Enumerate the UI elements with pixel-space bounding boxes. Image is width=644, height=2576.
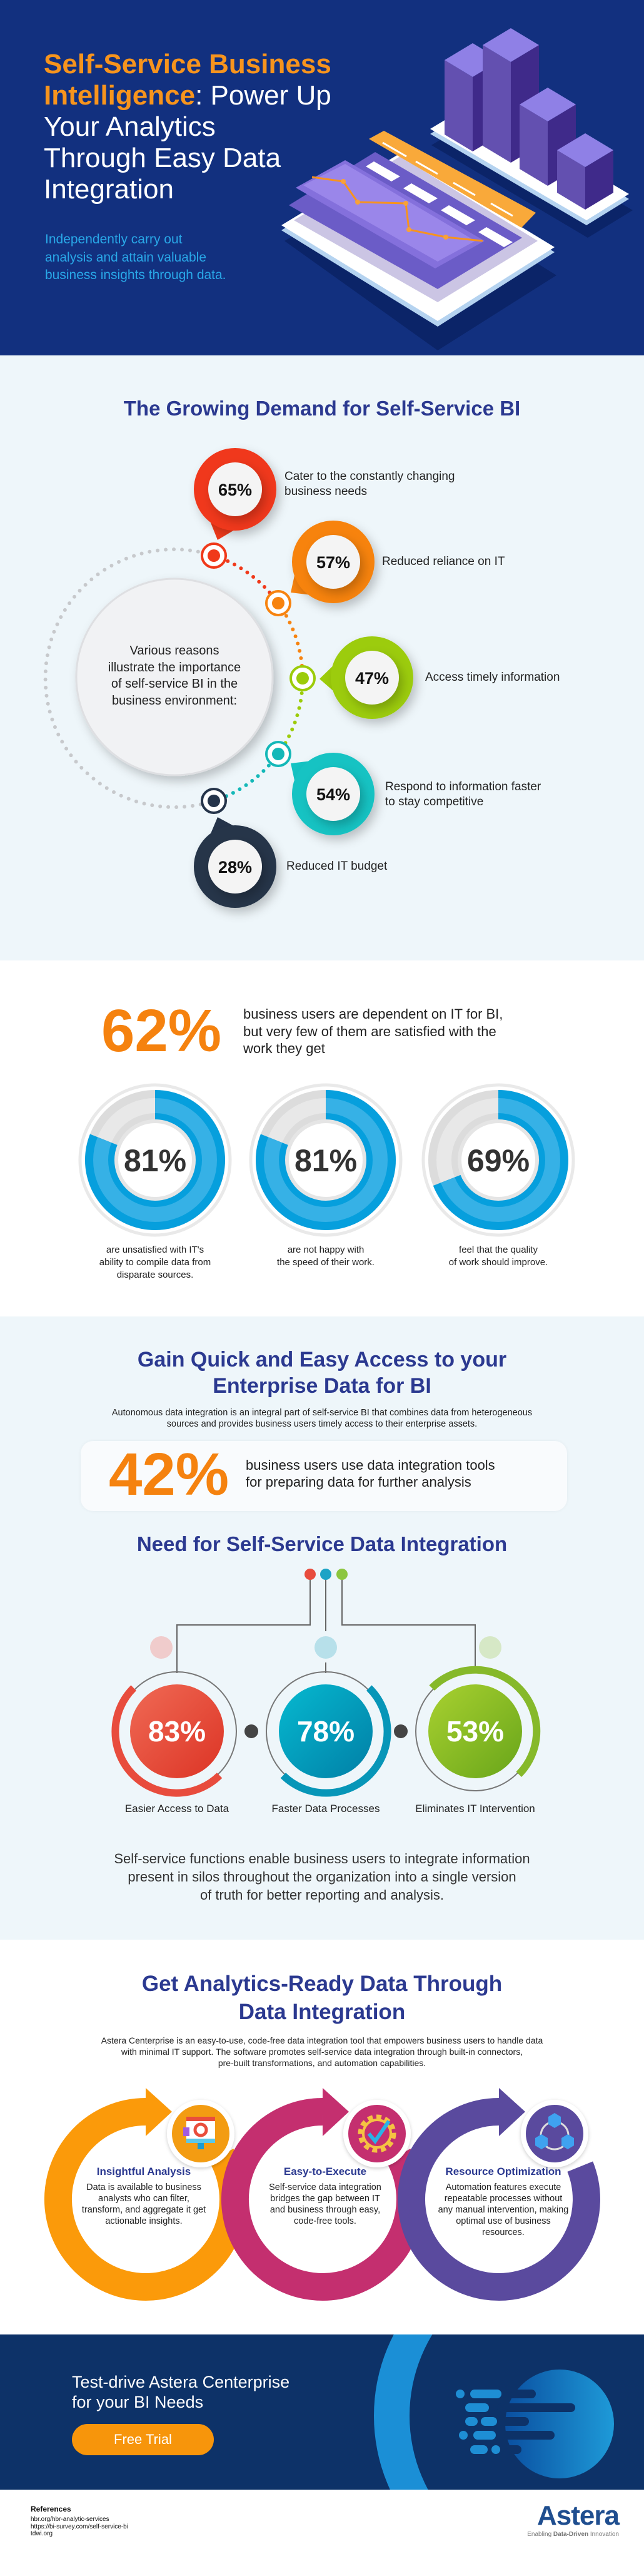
- donut label 3: feel that the quality: [459, 1245, 538, 1255]
- arrow magenta: [235, 2088, 410, 2287]
- panel: growing demand: [0, 355, 644, 960]
- stat text: business users use data integration tools: [246, 1457, 495, 1473]
- arrow orange: [58, 2088, 233, 2287]
- intro text: Astera Centerprise is an easy-to-use, code-free data integration tool that empowers business users to handle data: [101, 2035, 543, 2045]
- stat text: but very few of them are satisfied with the: [243, 1024, 496, 1039]
- step 2: Easy-to-Execute: [284, 2166, 366, 2177]
- heading: Get Analytics-Ready Data Through: [142, 1972, 502, 1996]
- donut label 3: [449, 1245, 548, 1268]
- panel: analytics-ready data: [0, 1940, 644, 2334]
- arrow purple: [411, 2088, 586, 2287]
- center text: of self-service BI in the: [111, 677, 238, 691]
- donut charts: 81%: [294, 1143, 357, 1178]
- intro text: [101, 2035, 543, 2068]
- button: free trial: Free Trial: [114, 2431, 172, 2447]
- circle chart: 53%: [446, 1715, 504, 1748]
- donut label 1: are unsatisfied with IT's: [106, 1245, 204, 1255]
- panel: 62% stats: [0, 960, 644, 1316]
- stat card 42%: [81, 1441, 567, 1511]
- step 1: Data is available to business analysts who can filter, transform, and aggregate it get actionable insights.: [82, 2182, 206, 2226]
- label 28: Reduced IT budget: [286, 860, 387, 873]
- label 54: [385, 780, 541, 808]
- summary text: Self-service functions enable business users to integrate information: [114, 1851, 530, 1866]
- center circle: [76, 579, 273, 775]
- references: [31, 2505, 128, 2537]
- references: hbr.org/hbr-analytic-services: [31, 2516, 109, 2523]
- center text: [108, 644, 241, 707]
- intro text: with minimal IT support. The software promotes self-service data integration through built-in connectors,: [121, 2047, 523, 2057]
- heading: Gain Quick and Easy Access to your: [138, 1348, 506, 1372]
- heading: Data Integration: [239, 2000, 405, 2024]
- bubbles: 28%: [218, 858, 252, 877]
- label 54: Respond to information faster: [385, 780, 541, 793]
- label 65: business needs: [284, 485, 367, 498]
- intro text: pre-built transformations, and automation capabilities.: [218, 2058, 426, 2068]
- bubbles: 57%: [316, 553, 350, 572]
- label 47: Access timely information: [425, 671, 560, 684]
- button: free trial: [72, 2424, 214, 2455]
- circle chart: [111, 1569, 540, 1797]
- donut label 1: ability to compile data from: [99, 1257, 211, 1268]
- center text: business environment:: [112, 693, 237, 707]
- circle label 3: Eliminates IT Intervention: [415, 1803, 535, 1815]
- donut charts: [79, 1084, 575, 1236]
- big stat 42%: 42%: [109, 1441, 229, 1508]
- stat text: work they get: [243, 1041, 325, 1056]
- donut label 1: disparate sources.: [117, 1270, 193, 1280]
- label 54: to stay competitive: [385, 795, 483, 808]
- title: Integration: [44, 174, 174, 205]
- icon circles: [167, 2100, 588, 2167]
- donut label 3: of work should improve.: [449, 1257, 548, 1268]
- intro text: Autonomous data integration is an integral part of self-service BI that combines data from heterogeneous: [112, 1408, 532, 1418]
- summary text: of truth for better reporting and analysis.: [200, 1887, 444, 1903]
- logo: astera: Astera: [537, 2500, 619, 2531]
- title: [44, 49, 331, 205]
- graphic: astera emblem: [374, 2334, 614, 2490]
- stat text: [243, 1006, 503, 1056]
- label 57: Reduced reliance on IT: [382, 555, 505, 568]
- references: https://bi-survey.com/self-service-bi: [31, 2523, 128, 2530]
- summary text: [114, 1851, 530, 1903]
- stat text: business users are dependent on IT for BI,: [243, 1006, 503, 1022]
- markers: [202, 544, 314, 813]
- bubbles: 65%: [218, 481, 252, 499]
- radial chart: [44, 448, 421, 917]
- cta text: [72, 2373, 289, 2411]
- panel: call to action: [0, 2334, 644, 2490]
- summary text: present in silos throughout the organization into a single version: [128, 1869, 516, 1885]
- label 65: Cater to the constantly changing: [284, 470, 455, 483]
- donut label 2: the speed of their work.: [277, 1257, 375, 1268]
- cta text: for your BI Needs: [72, 2393, 203, 2411]
- heading: [138, 1348, 506, 1398]
- references: tdwi.org: [31, 2530, 53, 2537]
- subtitle: [45, 232, 226, 282]
- subtitle: Independently carry out: [45, 232, 182, 247]
- step 3: Automation features execute repeatable processes without any manual intervention, making optimal use of business resources.: [438, 2182, 568, 2237]
- bars: [445, 28, 613, 210]
- stat text: for preparing data for further analysis: [246, 1474, 471, 1490]
- heading: Enterprise Data for BI: [213, 1374, 431, 1398]
- cycle arrows: [44, 2088, 600, 2301]
- donut label 2: [277, 1245, 375, 1268]
- donut charts: 69%: [467, 1143, 530, 1178]
- references: References: [31, 2505, 71, 2513]
- subtitle: analysis and attain valuable: [45, 250, 206, 264]
- big stat 62%: 62%: [101, 997, 221, 1064]
- donut label 2: are not happy with: [288, 1245, 364, 1255]
- panel: data integration need: [0, 1316, 644, 1940]
- title: Through Easy Data: [44, 143, 281, 173]
- subheading: Need for Self-Service Data Integration: [137, 1532, 507, 1555]
- step 3: Resource Optimization: [445, 2166, 561, 2177]
- bubbles: 47%: [355, 669, 389, 688]
- step 1: Insightful Analysis: [97, 2166, 191, 2177]
- bubbles: [194, 448, 413, 908]
- donut label 1: [99, 1245, 211, 1280]
- bubbles: 54%: [316, 785, 350, 804]
- circle chart: 78%: [297, 1715, 355, 1748]
- circle chart: 83%: [148, 1715, 206, 1748]
- panel: footer: [0, 2490, 644, 2576]
- intro text: [111, 1408, 532, 1429]
- donut charts: 81%: [124, 1143, 186, 1178]
- title: Your Analytics: [44, 111, 216, 142]
- subtitle: business insights through data.: [45, 268, 226, 282]
- heading: [142, 1972, 502, 2024]
- panel: hero: [0, 0, 644, 355]
- cta text: Test-drive Astera Centerprise: [72, 2373, 289, 2391]
- title: Intelligence: Power Up: [44, 80, 331, 111]
- circle label 1: Easier Access to Data: [125, 1803, 229, 1815]
- heading: The Growing Demand for Self-Service BI: [124, 397, 520, 420]
- intro text: sources and provides business users timely access to their enterprise assets.: [167, 1419, 477, 1429]
- hero illustration: [281, 28, 633, 350]
- logo: astera: Enabling Data-Driven Innovation: [527, 2531, 619, 2538]
- circle label 2: Faster Data Processes: [272, 1803, 380, 1815]
- label 65: [284, 470, 455, 498]
- center text: Various reasons: [129, 644, 219, 658]
- title: Self-Service Business: [44, 49, 331, 79]
- center text: illustrate the importance: [108, 661, 241, 675]
- step 2: Self-service data integration bridges the gap between IT and business through easy, code-free tools.: [269, 2182, 381, 2226]
- stat text: [246, 1457, 495, 1490]
